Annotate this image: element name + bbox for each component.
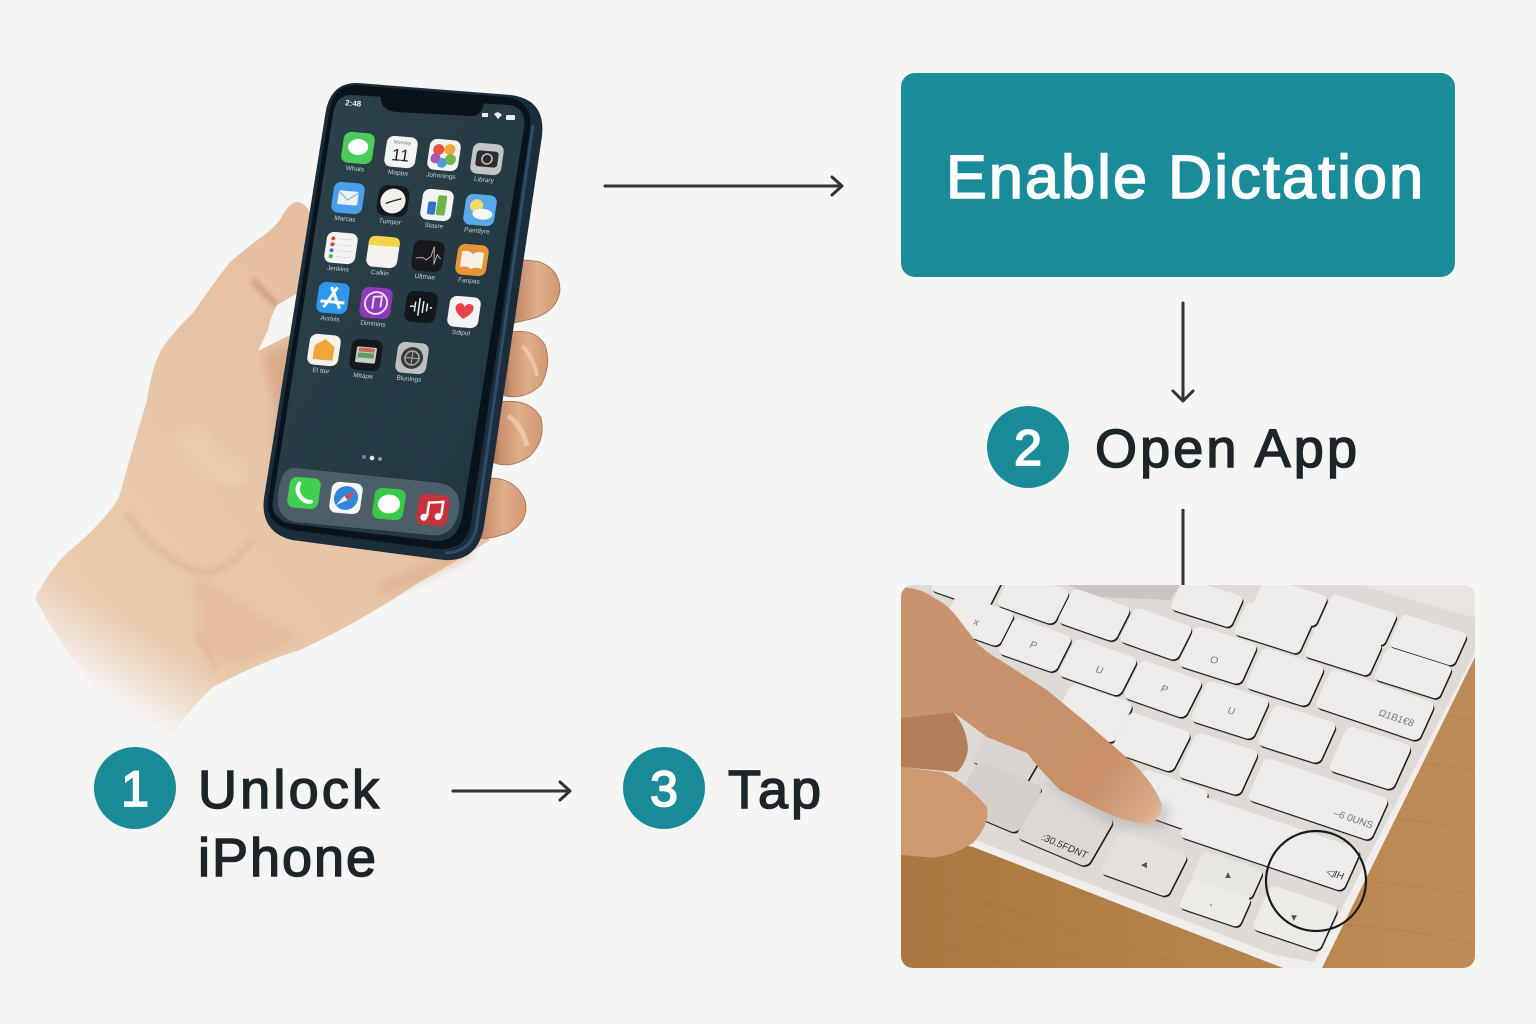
finger 1 bbox=[505, 260, 560, 324]
iPhone bbox=[264, 83, 542, 560]
step 1: Unlock iPhone bbox=[94, 747, 380, 888]
shadow bbox=[1040, 780, 1170, 830]
key legends: P bbox=[1028, 640, 1039, 652]
key legends: ◄ bbox=[1139, 860, 1149, 871]
reminders: Jenkins bbox=[326, 265, 350, 274]
index finger bbox=[901, 587, 1162, 824]
phone body bbox=[264, 83, 542, 560]
top panel bbox=[1360, 585, 1475, 618]
step 3: Tap bbox=[623, 747, 821, 829]
status bar bbox=[345, 98, 515, 120]
stocks bbox=[409, 239, 446, 282]
stocks: Ultmae bbox=[414, 273, 436, 282]
step 1: Unlock iPhone: Unlock bbox=[198, 760, 380, 820]
arrow: phone to enable dictation bbox=[605, 177, 842, 195]
web gap bbox=[258, 293, 298, 351]
keyboard photo bbox=[901, 556, 1475, 968]
messages: Whats bbox=[345, 165, 365, 174]
books: Fanpas bbox=[458, 277, 481, 286]
step 3: Tap: Tap bbox=[728, 760, 821, 820]
app store bbox=[314, 281, 351, 324]
keyboard body bbox=[901, 585, 1475, 968]
calendar bbox=[382, 135, 419, 178]
heading box: Enable Dictation: Enable Dictation bbox=[946, 143, 1423, 211]
screen bbox=[273, 95, 524, 541]
key legends: :30.5FDNT bbox=[1039, 833, 1089, 861]
health bbox=[445, 295, 482, 338]
finger 2 bbox=[498, 331, 548, 397]
camera: Library bbox=[473, 176, 495, 185]
key legends: ▼ bbox=[1289, 913, 1299, 924]
key legends bbox=[971, 617, 1416, 924]
maps: Stasre bbox=[424, 222, 444, 231]
weather bbox=[461, 193, 498, 236]
step 1: Unlock iPhone: 1 bbox=[121, 761, 149, 817]
calendar: Mappa bbox=[387, 169, 409, 178]
key legends: , bbox=[1210, 897, 1212, 908]
wallet: Mitapa bbox=[353, 372, 373, 381]
step 2: Open App: 2 bbox=[1014, 420, 1042, 476]
voice memos bbox=[403, 290, 439, 324]
page dots bbox=[362, 455, 382, 461]
phone app bbox=[286, 476, 322, 510]
settings: Blunings bbox=[396, 375, 423, 384]
calendar: 11 bbox=[390, 145, 411, 166]
step 3: Tap: 3 bbox=[650, 761, 678, 817]
key legends: ▲ bbox=[1223, 870, 1233, 881]
step 2: Open App bbox=[987, 406, 1357, 488]
key legends: –6 0UNS bbox=[1332, 808, 1375, 831]
highlight circle bbox=[1266, 831, 1366, 931]
step 2: Open App: Open App bbox=[1095, 419, 1357, 479]
notch bbox=[380, 96, 484, 116]
wallet bbox=[347, 338, 384, 381]
home: El ttor bbox=[312, 367, 331, 376]
wooden desk bbox=[901, 585, 1475, 968]
settings bbox=[393, 341, 430, 384]
heading box: Enable Dictation bbox=[901, 73, 1455, 277]
weather: Pamtlyre bbox=[464, 227, 491, 236]
arrow: enable dictation to open app bbox=[1173, 303, 1193, 401]
lower finger bbox=[901, 767, 987, 857]
calendar: Monday bbox=[393, 139, 412, 147]
step 1: Unlock iPhone: iPhone bbox=[198, 828, 376, 888]
mail: Marcas bbox=[334, 215, 357, 224]
clock bbox=[374, 184, 411, 227]
safari bbox=[328, 481, 364, 515]
maps bbox=[418, 188, 455, 231]
status bar: 2:48 bbox=[345, 98, 362, 109]
connector line to keyboard bbox=[1182, 509, 1184, 585]
middle finger bbox=[901, 712, 968, 772]
app icons bbox=[305, 131, 505, 384]
books bbox=[453, 243, 490, 286]
key legends: U bbox=[1093, 665, 1105, 677]
key legends: U bbox=[1225, 706, 1237, 718]
reminders bbox=[322, 231, 359, 274]
messages dock bbox=[371, 487, 407, 521]
camera bbox=[468, 142, 505, 185]
keys bbox=[930, 556, 1468, 951]
key legends: ◁IH bbox=[1324, 867, 1346, 883]
app store: Acrivis bbox=[320, 315, 341, 324]
key legends: x bbox=[971, 617, 981, 629]
notes bbox=[364, 235, 401, 278]
photos: Johnnings bbox=[426, 172, 457, 181]
itunes: Dimmins bbox=[360, 320, 387, 329]
photos bbox=[425, 138, 462, 181]
key legends: P bbox=[1159, 684, 1170, 696]
finger 3 bbox=[485, 401, 542, 465]
notes: Calkin bbox=[370, 269, 390, 278]
arrow: unlock to tap bbox=[453, 782, 570, 800]
clock: Tumpor bbox=[378, 218, 402, 227]
key legends: Ω1B1€8 bbox=[1376, 708, 1416, 730]
home bbox=[305, 333, 342, 376]
itunes bbox=[357, 286, 394, 329]
dock icons bbox=[286, 476, 451, 527]
fingers bbox=[901, 587, 1170, 857]
messages bbox=[339, 131, 376, 174]
mail bbox=[329, 181, 366, 224]
music bbox=[415, 493, 451, 527]
key legends: O bbox=[1208, 655, 1220, 667]
dock bbox=[278, 468, 459, 535]
palm and thumb bbox=[35, 202, 490, 734]
health: Sdipol bbox=[451, 329, 470, 338]
finger 4 bbox=[470, 478, 526, 538]
hand holding phone bbox=[35, 202, 560, 734]
